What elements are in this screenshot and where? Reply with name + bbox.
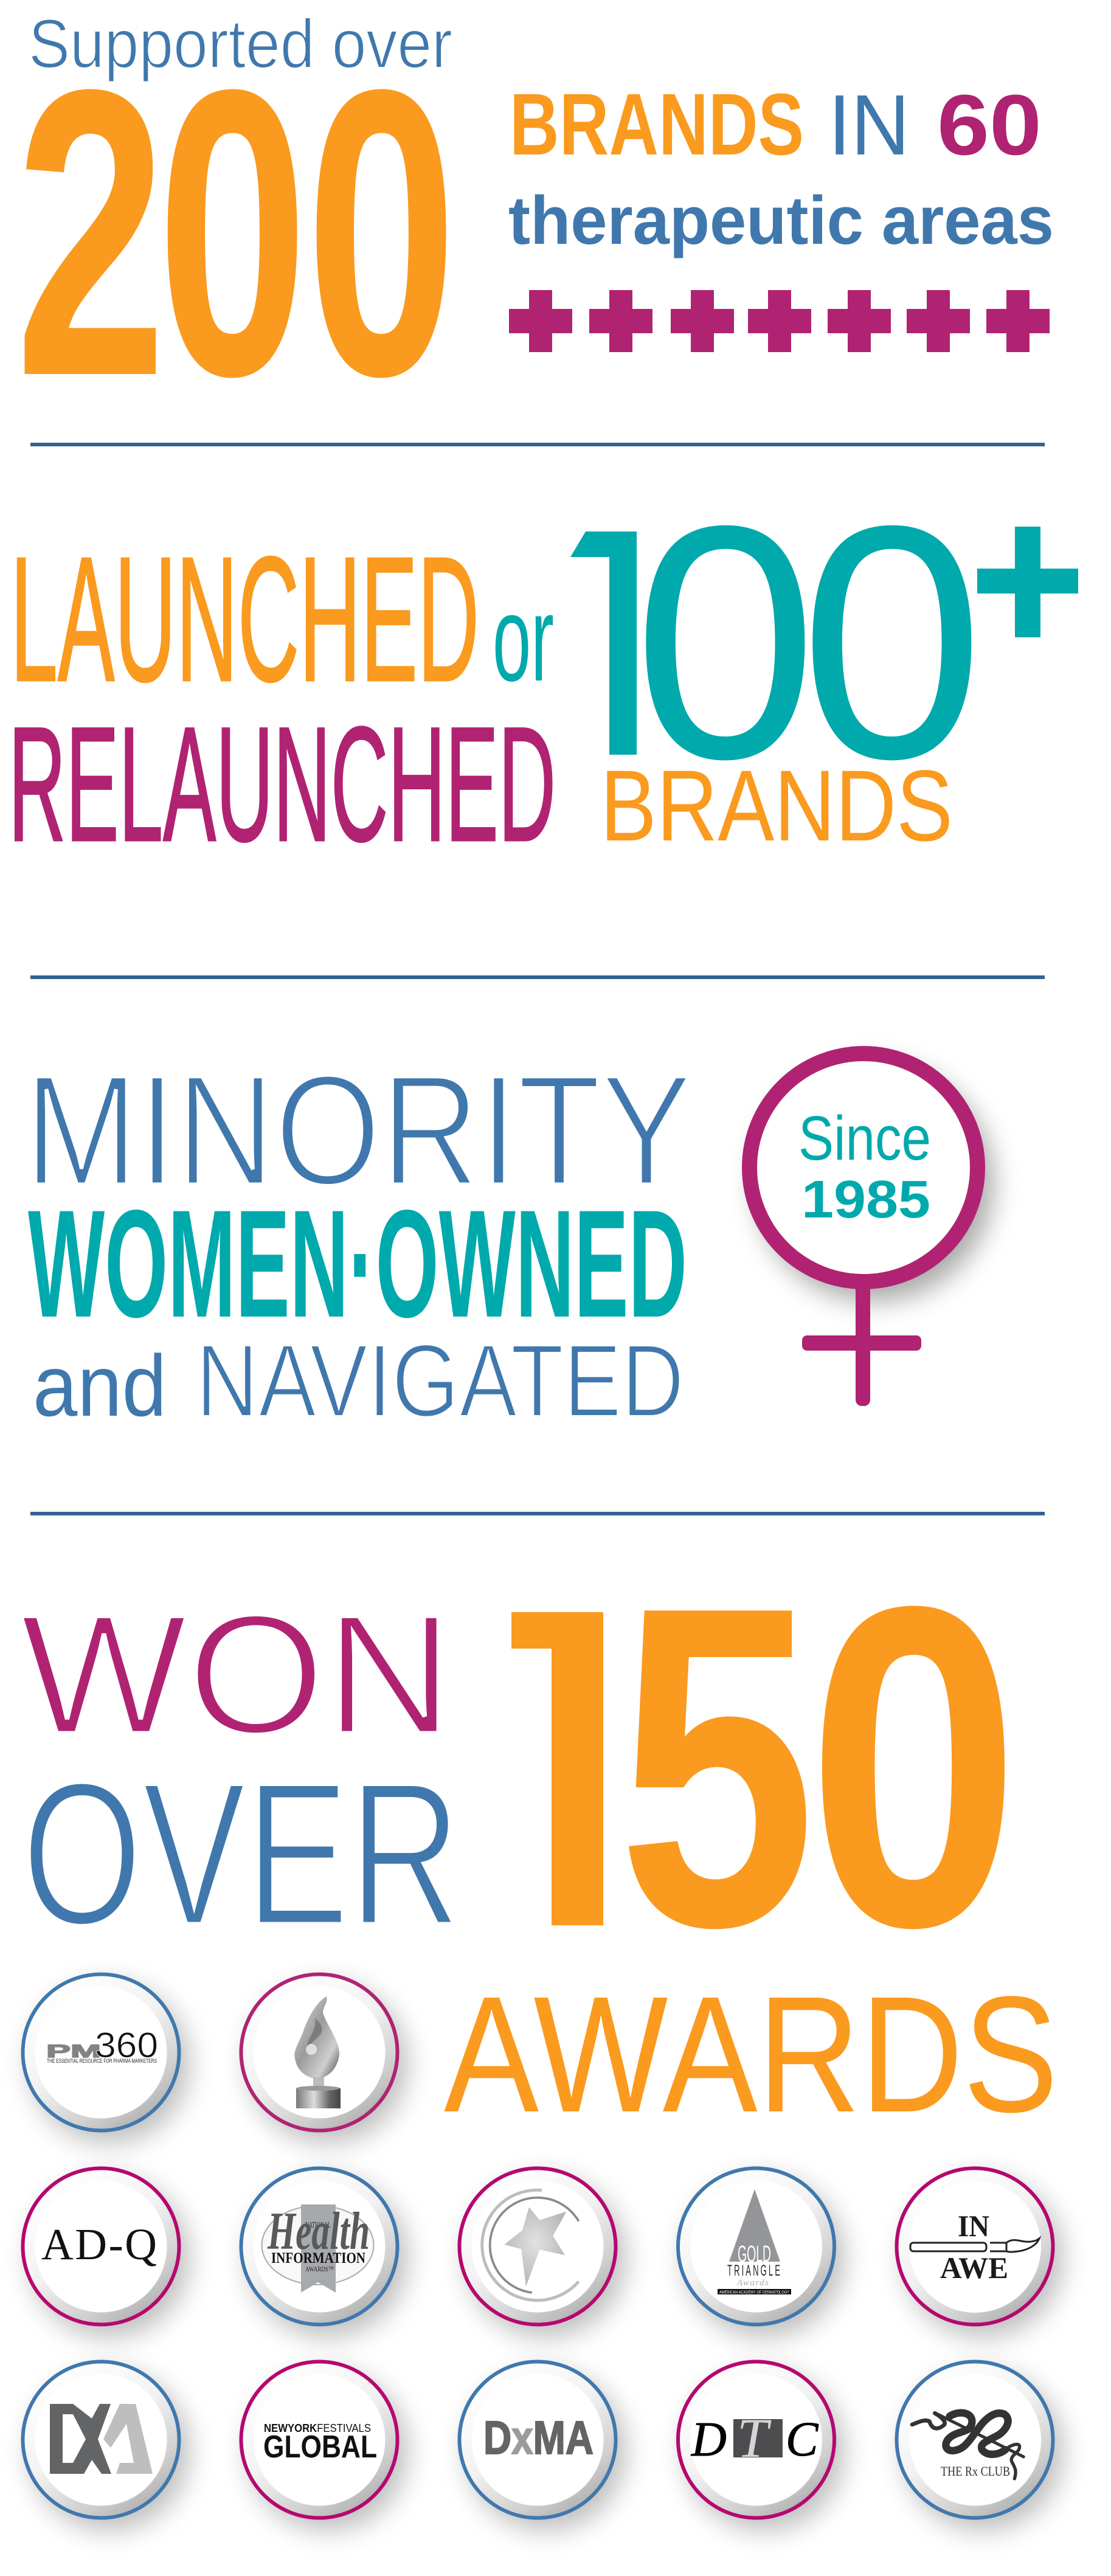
award badge: AD-Q <box>23 2169 189 2337</box>
logo text: GOLD: GOLD <box>738 2242 771 2267</box>
panel: won over 150 awards <box>20 1511 1058 2147</box>
icon: row of seven plus signs <box>509 290 1050 352</box>
logo text: C: C <box>786 2413 819 2467</box>
logo text: 360: 360 <box>95 2026 158 2065</box>
logo: triangle <box>729 2189 780 2262</box>
big number: 100 <box>570 525 972 760</box>
text: Since: Since <box>798 1103 931 1173</box>
big number: 150: 5 <box>618 1511 816 2021</box>
award badge: National Health Information Awards <box>241 2169 407 2337</box>
logo text: National: NATIONAL <box>305 2220 331 2229</box>
logo text: Awards: Awards <box>736 2278 769 2288</box>
logo text: Information: INFORMATION <box>271 2250 365 2266</box>
text: therapeutic areas: therapeutic areas <box>508 182 1054 258</box>
logo: academy banner: AMERICAN ACADEMY OF DERMATOLOGY <box>719 2289 789 2295</box>
logo text: AD-Q: AD-Q <box>41 2220 157 2269</box>
logo: A mark <box>103 2404 153 2474</box>
logo: dark square <box>733 2419 783 2457</box>
text: BRANDS IN 60: BRANDS <box>510 75 804 173</box>
award badge: Gold Triangle <box>678 2169 844 2337</box>
award badge: DTC <box>678 2362 844 2530</box>
award badge: flame trophy <box>241 1974 407 2143</box>
text: WON: WON <box>20 1580 453 1770</box>
logo tagline: THE ESSENTIAL RESOURCE FOR PHARMA MARKETERS <box>47 2058 157 2064</box>
text: BRANDS IN 60: IN <box>828 77 910 173</box>
icon: paint brush <box>910 2238 1039 2252</box>
logo: ribbon oval <box>261 2204 373 2293</box>
panel: minority women-owned and navigated <box>24 1042 993 1439</box>
award badge: silver star <box>460 2169 626 2337</box>
logo text: IN: IN <box>958 2209 989 2243</box>
panel: launched or relaunched 100+ brands: RELAUNCHED <box>9 693 556 875</box>
panel: supported over 200 brands <box>15 5 1054 460</box>
text: and NAVIGATED: NAVIGATED <box>196 1323 684 1439</box>
logo text: Awards: AWARDS™ <box>305 2265 334 2273</box>
logo text: New York Festivals: NEWYORKFESTIVALS <box>264 2422 371 2434</box>
logo text: T: T <box>737 2407 772 2469</box>
logo text: Health: Health <box>267 2202 370 2261</box>
icon: star with arcs <box>482 2190 579 2301</box>
text: BRANDS IN 60: 60 <box>937 77 1042 173</box>
logo text: D: D <box>691 2413 727 2467</box>
award badge: DXA <box>23 2362 189 2530</box>
award badge: New York Festivals Global <box>241 2362 407 2530</box>
logo text: DxMA: DxMA <box>483 2412 594 2464</box>
icon: female symbol badge <box>749 1053 993 1406</box>
icon: plus sign <box>977 527 1078 637</box>
text: OVER: OVER <box>22 1740 461 1967</box>
big number: 100: 00 <box>633 457 985 828</box>
logo text: PM: PM <box>46 2041 101 2062</box>
logo: DX mark <box>50 2404 111 2474</box>
logo text: AWE: AWE <box>940 2251 1008 2285</box>
text: MINORITY: MINORITY <box>24 1042 692 1218</box>
big number: 150: 1 <box>451 1512 700 2023</box>
text: and NAVIGATED: and <box>33 1338 167 1435</box>
text: 1985: 1985 <box>801 1170 930 1229</box>
award badge: In Awe <box>896 2169 1063 2337</box>
text: and NAVIGATED <box>33 1323 684 1439</box>
logo text: The Rx Club: THE Rx CLUB <box>941 2463 1010 2479</box>
big number: 200: 200 <box>15 5 457 460</box>
big number: 150 <box>451 1511 1020 2023</box>
award badge: DxMA <box>460 2362 626 2530</box>
icon: trophy <box>294 1996 341 2108</box>
big number: 150: 0 <box>807 1511 1020 2021</box>
award badge: PM360 <box>23 1974 189 2143</box>
logo text: TRIANGLE: TRIANGLE <box>727 2262 782 2279</box>
text: or: or <box>493 571 554 707</box>
text: BRANDS: BRANDS <box>600 750 953 862</box>
award badge: The Rx Club <box>896 2362 1063 2530</box>
logo text: Global: GLOBAL <box>263 2429 377 2465</box>
text: Supported over: Supported over <box>29 5 452 82</box>
panel: launched or relaunched 100+ brands <box>15 525 1078 843</box>
panel: launched or relaunched 100+ brands: LAUNCHED <box>10 520 479 718</box>
icon: intertwined snakes <box>912 2413 1023 2479</box>
big number: 100: 1 <box>519 454 704 825</box>
